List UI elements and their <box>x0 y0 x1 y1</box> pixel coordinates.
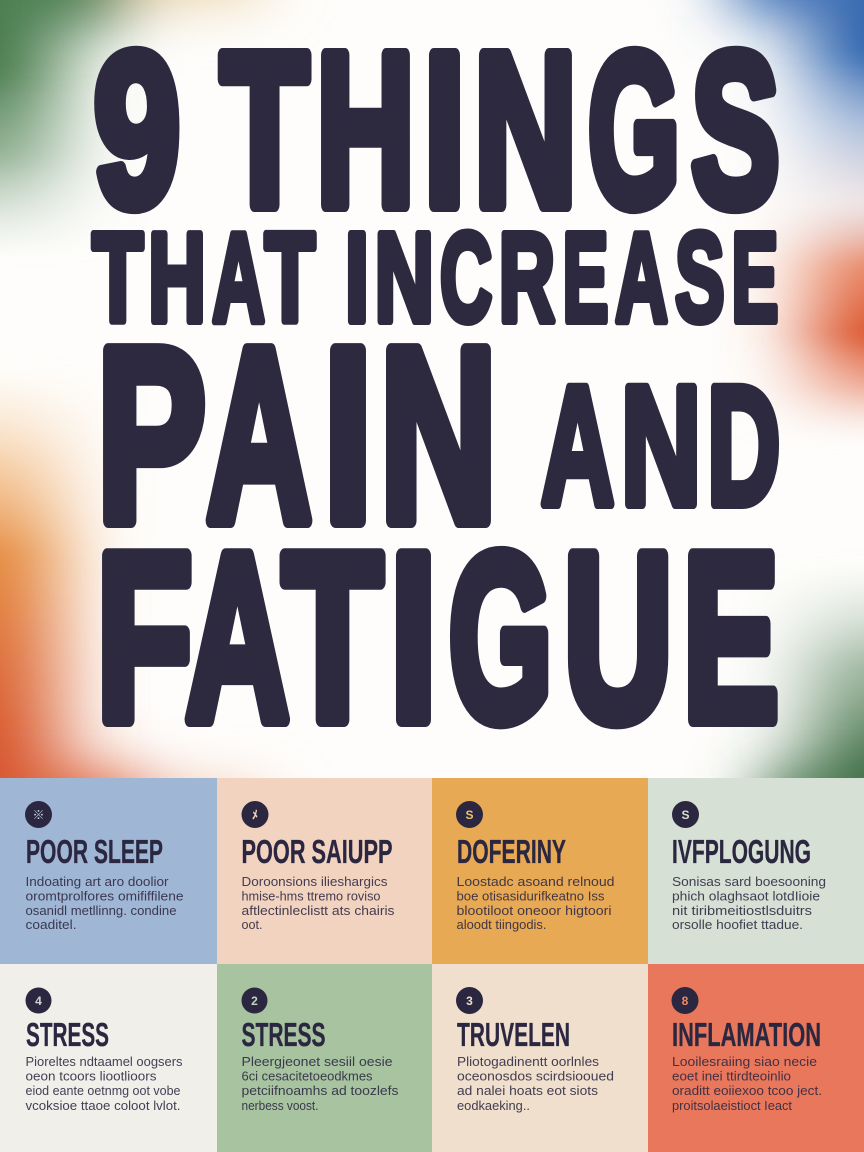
text block: osanidl metllinng. condine <box>26 903 176 918</box>
title line: FATIGUE: A <box>186 504 289 770</box>
panel: inflamation <box>648 964 864 1152</box>
panel: poor sleep <box>0 778 217 964</box>
text block: nit tiribmeitiostlsduitrs <box>672 903 813 918</box>
title line: THAT INCREASE: S <box>675 206 725 348</box>
text block: phich olaghsaot lotdIioie <box>672 888 820 904</box>
text block: oot. <box>242 917 262 932</box>
title line: AND <box>541 351 780 541</box>
title line: FATIGUE: U <box>564 506 673 771</box>
title line: PAIN: I <box>324 298 372 574</box>
text block: Sonisas sard boesooning <box>672 874 826 889</box>
title line: THAT INCREASE: C <box>440 207 492 348</box>
text block <box>26 1054 183 1113</box>
text block: Loostadc asoand relnoud <box>456 874 614 889</box>
text block: eodkaeking.. <box>457 1098 530 1113</box>
icon: badge <box>672 987 698 1014</box>
icon: badge: S <box>681 808 690 822</box>
title line: 9 THINGS: T <box>221 9 308 252</box>
text block: oromtprolfores omififfilene <box>26 888 184 904</box>
icon: badge: 4 <box>35 994 42 1008</box>
heading: DOFERINY <box>457 833 566 870</box>
text block <box>242 874 395 932</box>
icon: badge <box>672 801 699 828</box>
icon: badge: ※ <box>32 808 45 822</box>
text block: Pleergjeonet sesiil oesie <box>242 1054 392 1069</box>
title line: AND: A <box>541 351 614 540</box>
title line: THAT INCREASE: T <box>265 207 315 348</box>
title line: THAT INCREASE: E <box>563 207 608 348</box>
icon: badge: S <box>465 808 474 822</box>
text block: nerbess voost. <box>242 1098 318 1113</box>
panel: stress one <box>0 964 217 1152</box>
title line: THAT INCREASE: A <box>615 207 668 348</box>
text block: Pliotogadinentt oorlnles <box>457 1054 600 1069</box>
title line: FATIGUE: I <box>390 504 437 770</box>
panel: ifplogung <box>648 778 864 964</box>
title line: 9 THINGS: G <box>588 9 680 252</box>
icon: badge <box>456 801 483 828</box>
text block <box>672 874 826 932</box>
title line: FATIGUE: G <box>449 504 552 770</box>
title line: FATIGUE: T <box>283 505 382 771</box>
text block: hmise-hms ttremo roviso <box>242 888 380 904</box>
panel: doferiny <box>432 778 648 964</box>
text block: petciifnoamhs ad toozlefs <box>242 1083 399 1098</box>
title line: 9 THINGS <box>94 7 780 252</box>
icon: badge: 2 <box>251 994 258 1008</box>
heading: STRESS <box>242 1016 326 1053</box>
title line: THAT INCREASE: A <box>212 207 265 348</box>
background gradient <box>0 0 864 845</box>
title <box>92 7 780 771</box>
text block: eiod eante oetnmg oot vobe <box>26 1083 180 1098</box>
text block <box>457 1054 614 1113</box>
title line: PAIN <box>97 296 497 574</box>
text block: vcoksioe ttaoe coloot lvlot. <box>26 1098 180 1113</box>
title line: THAT INCREASE: R <box>499 208 555 349</box>
title line: PAIN: P <box>97 299 206 574</box>
icon: badge: ﾒ <box>252 808 258 822</box>
text block <box>456 874 614 932</box>
text block <box>672 1054 822 1113</box>
title line: FATIGUE <box>96 504 779 771</box>
text block: orsolle hoofiet ttadue. <box>672 917 803 932</box>
panel: truvelen <box>432 964 648 1152</box>
text block: Doroonsions ilieshargics <box>242 874 388 889</box>
text block <box>242 1054 399 1113</box>
icon: badge: 3 <box>466 994 473 1008</box>
title line: THAT INCREASE: T <box>92 206 143 348</box>
title line: FATIGUE: F <box>96 504 192 770</box>
title line: PAIN: N <box>380 298 497 574</box>
icon: badge: 8 <box>682 994 689 1008</box>
text block: boe otisasidurifkeatno Iss <box>456 888 605 904</box>
title line: 9 THINGS: N <box>474 9 577 252</box>
heading: STRESS <box>26 1016 109 1053</box>
icon: badge <box>456 987 483 1014</box>
title line: THAT INCREASE: N <box>375 207 434 348</box>
text block: 6ci cesacitetoeodkmes <box>242 1068 373 1084</box>
title line: AND: D <box>707 351 780 540</box>
heading: TRUVELEN <box>457 1016 570 1053</box>
icon: badge <box>26 988 52 1014</box>
text block <box>26 874 184 932</box>
text block: eoet inei ttirdteoinlio <box>672 1068 791 1084</box>
text block: blootiloot oneoor higtoori <box>456 903 612 918</box>
icon: badge <box>242 801 268 828</box>
title line: 9 THINGS: S <box>691 9 780 252</box>
title line: THAT INCREASE: H <box>148 209 206 348</box>
text block: oceonosdos scirdsiooued <box>457 1068 614 1084</box>
text block: Indoating art aro doolior <box>26 874 169 889</box>
heading: POOR SLEEP <box>26 833 163 870</box>
panel: stress two <box>217 964 432 1152</box>
heading: POOR SAIUPP <box>242 833 392 870</box>
title line: PAIN: A <box>206 296 312 573</box>
text block: coaditel. <box>26 917 76 932</box>
text block: aloodt tiingodis. <box>456 917 546 932</box>
text block: oraditt eoiiexoo tcoo ject. <box>672 1083 822 1098</box>
title line: 9 THINGS: 9 <box>94 9 180 252</box>
title line: THAT INCREASE: I <box>345 207 369 348</box>
icon: badge <box>242 988 268 1014</box>
title line: FATIGUE: E <box>683 504 779 770</box>
title line: AND: N <box>621 353 701 541</box>
title line: 9 THINGS: H <box>316 7 415 252</box>
title line: THAT INCREASE: E <box>732 207 778 348</box>
text block: Pioreltes ndtaamel oogsers <box>26 1054 183 1069</box>
title line: 9 THINGS: I <box>424 8 465 252</box>
text block: Looilesraiing siao necie <box>672 1054 817 1069</box>
title line: THAT INCREASE <box>92 206 778 349</box>
text block: ad nalei hoats eot siots <box>457 1083 599 1098</box>
text block: oeon tcoors liootlioors <box>26 1068 157 1084</box>
text block: proitsolaeistioct Ieact <box>672 1098 792 1113</box>
text block: aftlectinleclistt ats chairis <box>242 903 395 918</box>
panel: poor saiupp <box>217 778 432 964</box>
icon: badge <box>25 801 52 828</box>
